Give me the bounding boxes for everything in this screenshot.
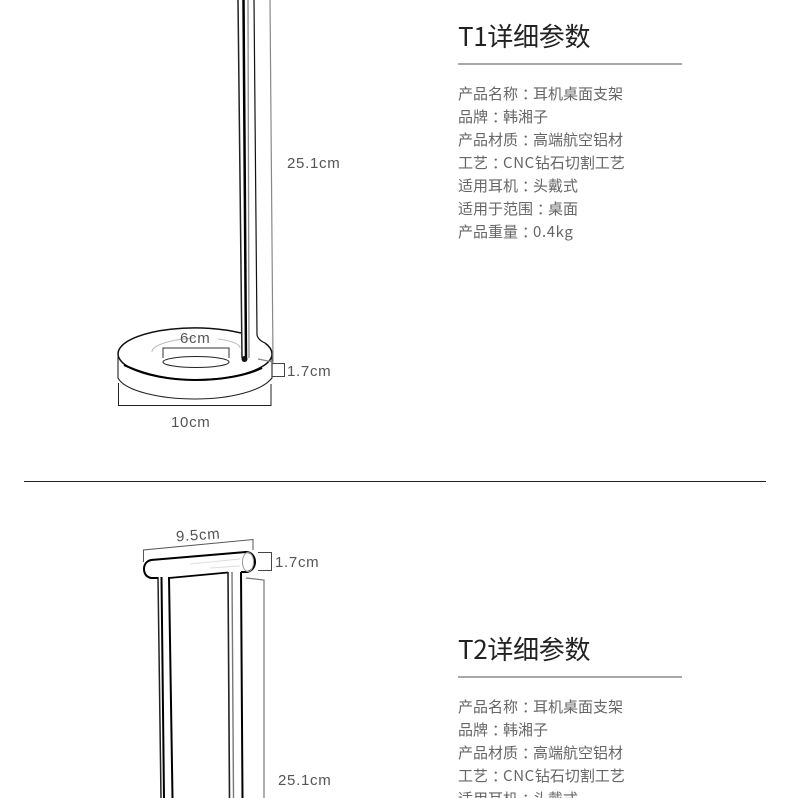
text block: T2 parameters	[458, 696, 625, 798]
text block: T1 parameters: 工艺 ：CNC钻石切割工艺	[458, 152, 625, 173]
T2 thickness label: 1.7cm	[275, 554, 319, 571]
T1 thickness bracket	[272, 364, 284, 376]
T1 headphone stand drawing	[118, 0, 340, 431]
T1 thickness label: 1.7cm	[287, 363, 331, 380]
panel: T1 specifications	[458, 17, 682, 242]
T2 width bracket	[144, 540, 253, 562]
panel: T2 specifications	[458, 631, 682, 798]
T2 top bar	[144, 552, 255, 578]
text block: T1 parameters: 适用于范围 ：桌面	[458, 198, 578, 219]
T1 inner diameter bracket	[163, 348, 229, 358]
T2 width label: 9.5cm	[175, 525, 221, 546]
text block: T1 parameters: 产品名称 ：耳机桌面支架	[458, 83, 623, 104]
text block: T1 parameters	[458, 83, 625, 242]
heading rule	[458, 63, 682, 65]
T1 height label: 25.1cm	[287, 155, 340, 172]
text block: T2 parameters: 品牌 ：韩湘子	[458, 719, 548, 740]
T2 inner frame top	[169, 572, 228, 578]
heading: T2: T2详细参数	[458, 631, 590, 667]
T1 round base	[118, 328, 272, 399]
T2 headphone stand drawing	[144, 525, 331, 798]
T1 outer diameter bracket	[118, 383, 271, 406]
heading: T1: T1详细参数	[458, 17, 590, 54]
text block: T2 parameters: 产品名称 ：耳机桌面支架	[458, 696, 623, 717]
T1 stem	[238, 0, 265, 358]
T1 outer diameter label: 10cm	[171, 414, 210, 431]
text block: T2 parameters: 工艺 ：CNC钻石切割工艺	[458, 765, 625, 786]
T2 right upright	[228, 572, 242, 798]
T2 height label: 25.1cm	[278, 772, 331, 789]
section divider	[24, 480, 766, 482]
text block: T1 parameters: 产品重量 ：0.4kg	[458, 221, 573, 242]
T2 height dimension line	[246, 578, 264, 798]
text block: T2 parameters: 产品材质 ：高端航空铝材	[458, 742, 623, 763]
T2 thickness bracket	[258, 552, 272, 570]
text block: T1 parameters: 品牌 ：韩湘子	[458, 106, 548, 127]
heading rule	[458, 676, 682, 678]
text block: T1 parameters: 适用耳机 ：头戴式	[458, 175, 578, 196]
text block: T1 parameters: 产品材质 ：高端航空铝材	[458, 129, 623, 150]
T1 inner diameter label: 6cm	[180, 330, 210, 347]
T1 height dimension line	[258, 0, 273, 362]
T2 left upright	[158, 577, 172, 798]
